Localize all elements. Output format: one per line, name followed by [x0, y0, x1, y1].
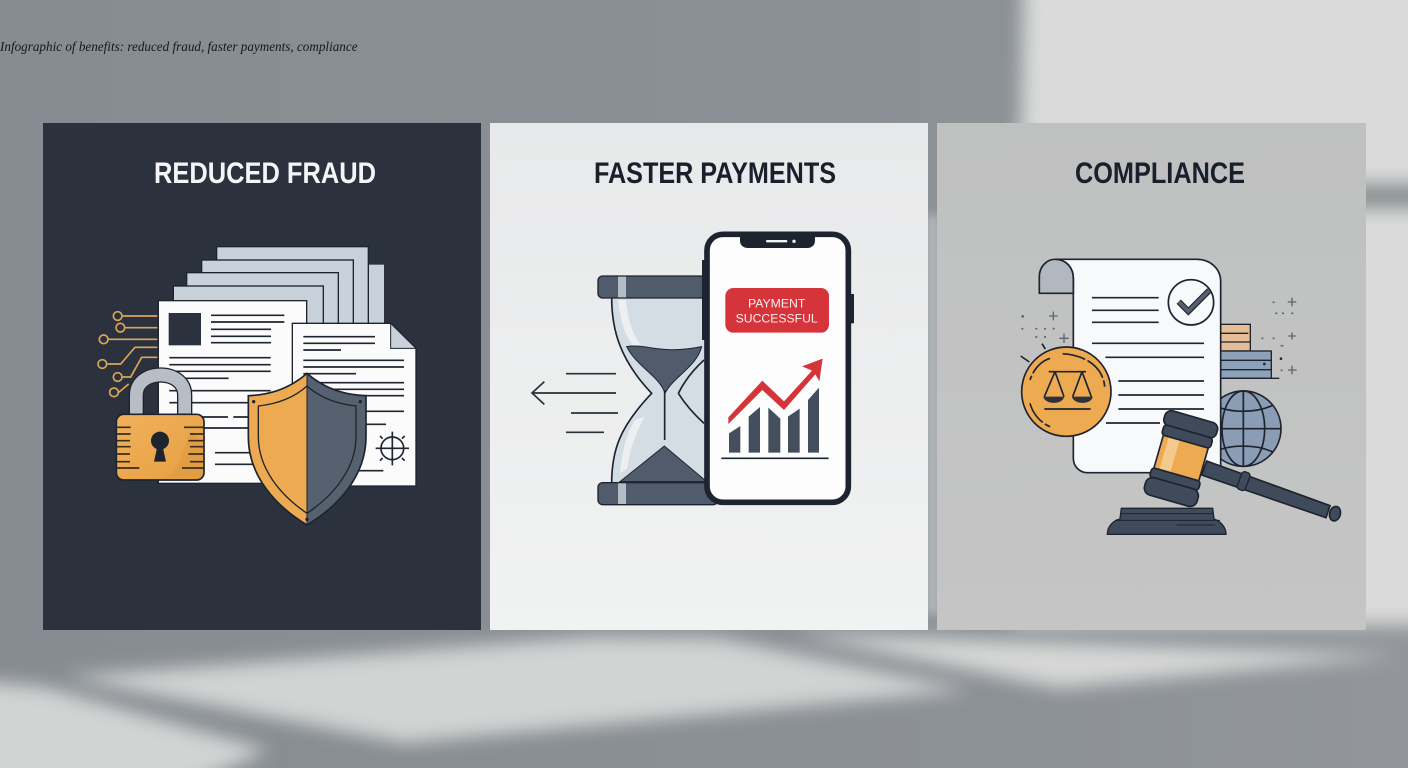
icon: scales of justice coin — [1021, 344, 1111, 436]
heading: compliance: COMPLIANCE — [1075, 157, 1245, 190]
icon: stacked documents — [173, 247, 384, 386]
icon: hourglass — [598, 276, 718, 505]
icon: circuit traces — [98, 312, 157, 397]
illustration: documents, lock and shield — [98, 247, 416, 525]
panel: reduced fraud — [43, 123, 481, 630]
illustration: contract, scales, globe and gavel — [1021, 259, 1342, 534]
heading: faster payments: FASTER PAYMENTS — [594, 157, 836, 190]
icon: padlock — [116, 375, 204, 480]
icon: shield — [248, 373, 366, 525]
caption: Infographic of benefits: reduced fraud, faster payments, compliance — [0, 39, 358, 54]
illustration: hourglass and phone — [532, 234, 854, 505]
document: left page — [158, 301, 307, 483]
badge: payment successful: PAYMENT — [748, 296, 806, 310]
heading: reduced fraud: REDUCED FRAUD — [154, 157, 376, 190]
icon: gavel — [1107, 409, 1342, 534]
badge: payment successful — [725, 288, 829, 333]
icon: speed arrow lines — [532, 374, 618, 432]
chart: rising bars and arrow — [721, 359, 829, 458]
badge: payment successful: SUCCESSFUL — [736, 311, 818, 325]
panel: faster payments — [490, 123, 928, 630]
icon: stacked books — [1220, 324, 1279, 378]
document: scroll — [1039, 259, 1221, 473]
icon: smartphone — [702, 234, 854, 502]
panel: compliance — [937, 123, 1366, 630]
icon: globe — [1206, 391, 1281, 466]
icon: sparkles — [1021, 298, 1297, 374]
document: right page — [292, 323, 416, 486]
